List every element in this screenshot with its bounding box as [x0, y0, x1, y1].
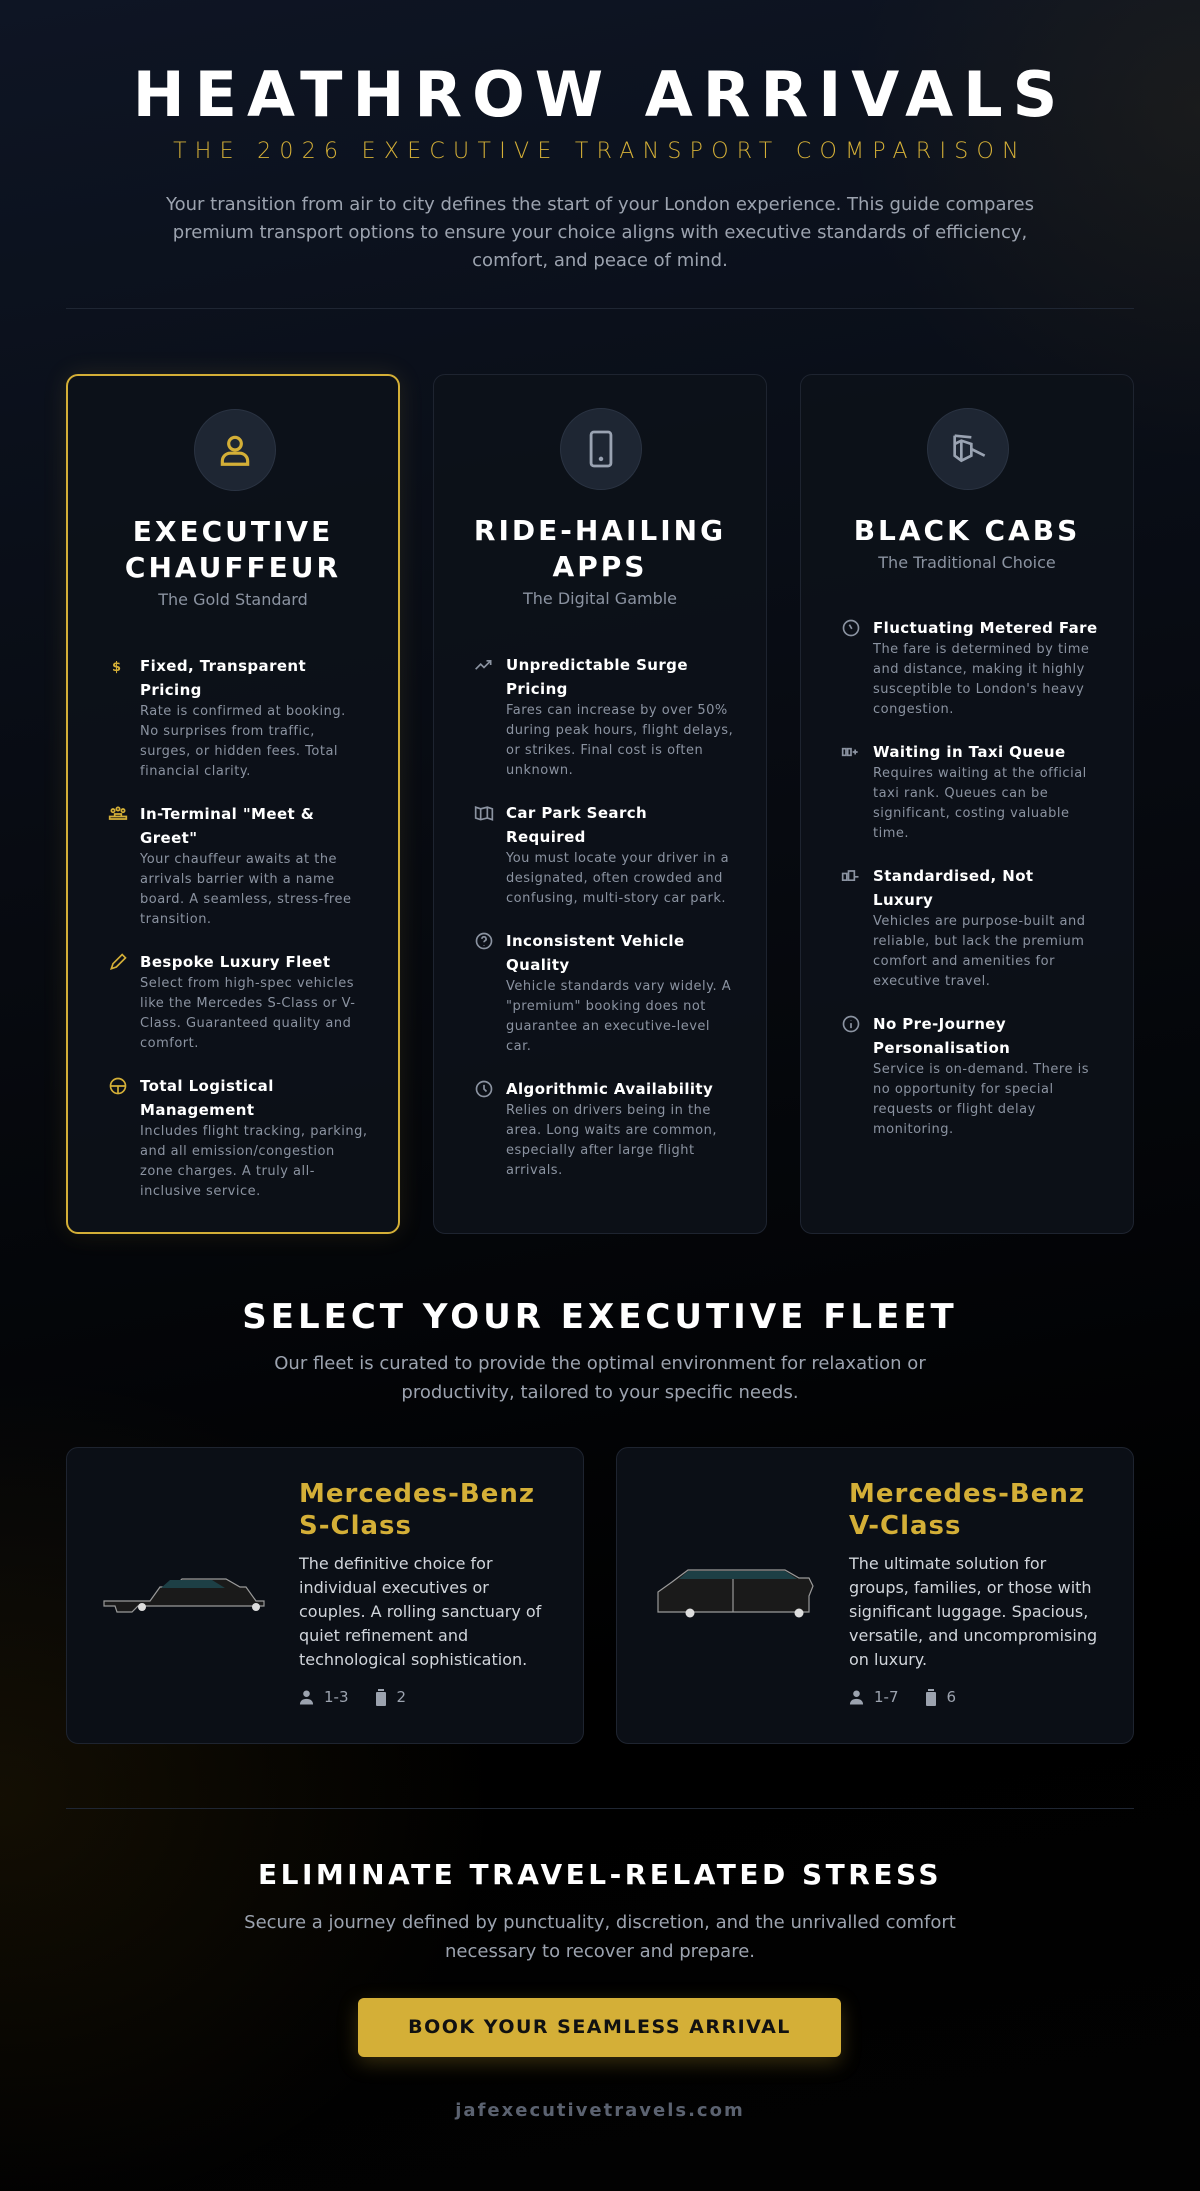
feature: taxi queue: Waiting in Taxi Queue	[873, 743, 1066, 761]
cta button: BOOK YOUR SEAMLESS ARRIVAL	[408, 2016, 791, 2038]
features list	[474, 656, 733, 1178]
feature: car park	[474, 804, 729, 906]
panel: s-class	[66, 1447, 584, 1744]
features list	[108, 657, 368, 1199]
feature: fixed pricing: Rate is confirmed at booking.	[140, 704, 346, 719]
feature: metered fare: Fluctuating Metered Fare	[873, 619, 1098, 637]
vehicle name: S-Class	[299, 1511, 412, 1541]
vehicle name: Mercedes-Benz	[849, 1479, 1085, 1509]
feature: standardised: Standardised, Not Luxury	[873, 867, 1034, 909]
icon: phone	[560, 408, 642, 490]
tagline: The Gold Standard	[158, 590, 308, 609]
feature: logistics: Includes flight tracking, parking, and all emission/congestion zone charges. A truly all-inclusive service.	[140, 1124, 368, 1199]
feature: car park: Car Park Search Required	[506, 804, 647, 846]
cta button	[358, 1998, 841, 2057]
heading: CHAUFFEUR	[125, 551, 341, 584]
feature: availability: Relies on drivers being in the area. Long waits are common, especially after large flight arrivals.	[506, 1103, 717, 1178]
fleet heading: SELECT YOUR EXECUTIVE FLEET	[242, 1297, 958, 1337]
feature: quality: Vehicle standards vary widely. A "premium" booking does not guarantee an executive-level car.	[506, 979, 731, 1054]
tagline: The Traditional Choice	[878, 553, 1056, 572]
feature: fixed pricing: $	[112, 660, 121, 675]
panel: executive chauffeur	[66, 374, 400, 1234]
cta text: Secure a journey defined by punctuality, discretion, and the unrivalled comfort necessary to recover and prepare.	[244, 1912, 956, 1962]
feature: fixed pricing	[112, 657, 346, 779]
heading	[474, 514, 726, 583]
specs	[850, 1688, 956, 1706]
feature: logistics: Total Logistical Management	[140, 1077, 274, 1119]
feature: car park: You must locate your driver in a designated, often crowded and confusing, multi-story car park.	[506, 851, 729, 906]
specs: 6	[946, 1688, 956, 1706]
panel: ride-hailing apps	[433, 374, 767, 1234]
heading: APPS	[553, 550, 647, 583]
specs: 2	[396, 1688, 406, 1706]
vehicle name	[849, 1479, 1085, 1541]
feature: meet and greet: In-Terminal "Meet & Greet"	[140, 805, 314, 847]
feature: personalisation	[842, 1015, 1089, 1137]
feature: meet and greet	[108, 805, 351, 927]
heading: RIDE-HAILING	[474, 514, 726, 547]
feature: fixed pricing: financial clarity.	[140, 764, 251, 779]
icon: person	[194, 409, 276, 491]
heading: EXECUTIVE	[133, 515, 333, 548]
panel: black cabs	[800, 374, 1134, 1234]
vehicle name: Mercedes-Benz	[299, 1479, 535, 1509]
feature: surge: Unpredictable Surge Pricing	[506, 656, 688, 698]
icon: van	[657, 1569, 814, 1618]
feature: personalisation: Service is on-demand. There is no opportunity for special requests or flight delay monitoring.	[873, 1062, 1089, 1137]
vehicle name: V-Class	[849, 1511, 962, 1541]
feature: fixed pricing: Fixed, Transparent Pricing	[140, 657, 306, 699]
features list	[842, 619, 1098, 1137]
feature: taxi queue	[842, 743, 1087, 841]
feature: meet and greet: Your chauffeur awaits at the arrivals barrier with a name board. A seamless, stress-free transition.	[140, 852, 351, 927]
feature: quality	[476, 932, 731, 1054]
feature: quality: Inconsistent Vehicle Quality	[506, 932, 685, 974]
feature: personalisation: No Pre-Journey Personalisation	[873, 1015, 1010, 1057]
feature: surge	[475, 656, 733, 778]
feature: metered fare	[842, 619, 1098, 717]
cta heading: ELIMINATE TRAVEL-RELATED STRESS	[258, 1858, 942, 1891]
icon: sedan	[103, 1578, 265, 1613]
description: The definitive choice for individual executives or couples. A rolling sanctuary of quiet refinement and technological sophistication.	[299, 1554, 541, 1669]
heading	[125, 515, 341, 584]
title: HEATHROW ARRIVALS	[133, 58, 1067, 131]
footer url: jafexecutivetravels.com	[455, 2100, 745, 2121]
subtitle: THE 2026 EXECUTIVE TRANSPORT COMPARISON	[173, 139, 1027, 164]
specs: 1-7	[874, 1688, 898, 1706]
specs	[300, 1688, 406, 1706]
feature: standardised	[842, 867, 1085, 989]
feature: luxury fleet	[110, 953, 356, 1051]
feature: fixed pricing: surges, or hidden fees. Total	[140, 744, 338, 759]
heading: BLACK CABS	[854, 514, 1080, 547]
feature: standardised: Vehicles are purpose-built and reliable, but lack the premium comfort and amenities for executive travel.	[873, 914, 1085, 989]
feature: luxury fleet: Select from high-spec vehicles like the Mercedes S-Class or V-Class. Guaranteed quality and comfort.	[140, 976, 356, 1051]
feature: taxi queue: Requires waiting at the official taxi rank. Queues can be significant, costing valuable time.	[873, 766, 1087, 841]
feature: luxury fleet: Bespoke Luxury Fleet	[140, 953, 330, 971]
feature: metered fare: The fare is determined by time and distance, making it highly susceptible to London's heavy congestion.	[873, 642, 1089, 717]
feature: surge: Fares can increase by over 50% during peak hours, flight delays, or strikes. Final cost is often unknown.	[506, 703, 733, 778]
fleet intro: Our fleet is curated to provide the optimal environment for relaxation or productivity, tailored to your specific needs.	[274, 1353, 926, 1403]
feature: availability	[476, 1080, 717, 1178]
tagline: The Digital Gamble	[523, 589, 677, 608]
feature: fixed pricing: No surprises from traffic,	[140, 724, 315, 739]
vehicle name	[299, 1479, 535, 1541]
specs: 1-3	[324, 1688, 348, 1706]
icon: cab	[927, 408, 1009, 490]
description: The ultimate solution for groups, families, or those with significant luggage. Spacious, versatile, and uncompromising on luxury.	[849, 1554, 1097, 1669]
intro text: Your transition from air to city defines the start of your London experience. This guide compares premium transport options to ensure your choice aligns with executive standards of efficiency, comfort, and peace of mind.	[166, 194, 1034, 271]
panel: v-class	[616, 1447, 1134, 1744]
feature: logistics	[110, 1077, 368, 1199]
feature: availability: Algorithmic Availability	[506, 1080, 713, 1098]
